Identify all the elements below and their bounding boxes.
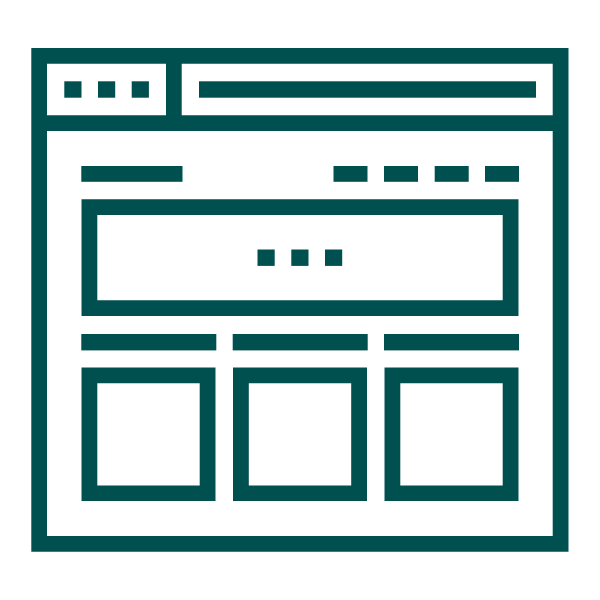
browser window frame	[31, 48, 569, 552]
column card middle	[233, 368, 367, 501]
hero loading dots	[258, 250, 342, 266]
navigation menu items	[334, 166, 519, 182]
column card left	[82, 368, 216, 501]
hero banner frame	[82, 199, 518, 316]
page logo bar	[81, 166, 182, 182]
address bar	[199, 81, 536, 98]
column card right	[384, 368, 518, 501]
window control dots	[64, 81, 149, 98]
column heading bars	[81, 334, 519, 350]
